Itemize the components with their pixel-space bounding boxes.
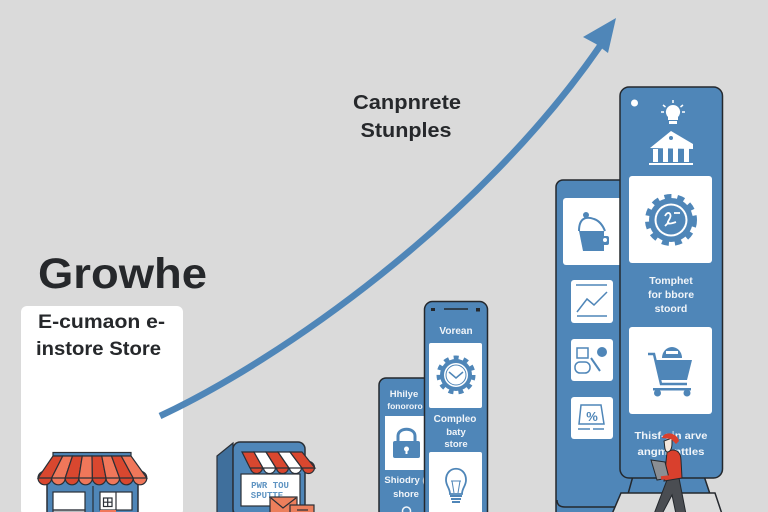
phone: small bbox=[379, 378, 449, 512]
card heading bbox=[36, 312, 165, 360]
phone: medium: baty bbox=[446, 427, 466, 438]
caption: angmenttles bbox=[638, 446, 705, 458]
cart card bbox=[629, 327, 712, 414]
lock card bbox=[385, 416, 430, 470]
wallet card bbox=[563, 198, 623, 265]
gear card bbox=[629, 176, 712, 263]
curve label bbox=[353, 92, 461, 142]
curve label: Canpnrete bbox=[353, 92, 461, 114]
status dot bbox=[631, 100, 638, 106]
phone: medium bbox=[424, 302, 488, 512]
growth arrow bbox=[160, 18, 616, 416]
gear clock card bbox=[429, 343, 482, 408]
icon: mail-order storefront bbox=[217, 442, 315, 512]
card heading: E-cumaon e- bbox=[38, 312, 165, 333]
title: Growhe bbox=[38, 250, 207, 298]
phone: small: fonororo bbox=[387, 401, 423, 411]
caption: Thisf-gin arve bbox=[634, 430, 708, 442]
icon: mail-order storefront: SPUTTE bbox=[251, 491, 284, 501]
bulb card bbox=[429, 452, 482, 512]
icon: light bulb bbox=[661, 100, 685, 124]
panel: e-commerce store card bbox=[21, 306, 183, 512]
curve label: Stunples bbox=[360, 120, 452, 142]
phone: large back bbox=[556, 180, 636, 512]
phone: medium: Compleo bbox=[434, 414, 476, 425]
person with tablet bbox=[651, 433, 686, 512]
icon: mail-order storefront: PWR TOU bbox=[251, 481, 289, 491]
phone: medium: store bbox=[444, 439, 468, 450]
tools card bbox=[571, 339, 613, 381]
body text: Tomphet bbox=[649, 275, 693, 287]
phone: small: Shiodry ( bbox=[384, 475, 426, 486]
body text: stoord bbox=[655, 303, 687, 315]
percent card: % bbox=[586, 409, 598, 424]
percent card bbox=[571, 397, 613, 439]
pedestal stand bbox=[612, 476, 722, 512]
caption bbox=[634, 430, 708, 458]
icon: small storefront bbox=[38, 452, 147, 512]
body text: for bbore bbox=[648, 289, 694, 301]
body text bbox=[648, 275, 694, 315]
chart card bbox=[571, 280, 613, 323]
phone: small: Hhilye bbox=[390, 389, 418, 400]
phone: medium: Vorean bbox=[439, 326, 473, 337]
card heading: instore Store bbox=[36, 339, 161, 360]
icon: bank building bbox=[649, 131, 693, 165]
phone: large front bbox=[620, 87, 722, 478]
phone: small: shore bbox=[393, 489, 419, 500]
